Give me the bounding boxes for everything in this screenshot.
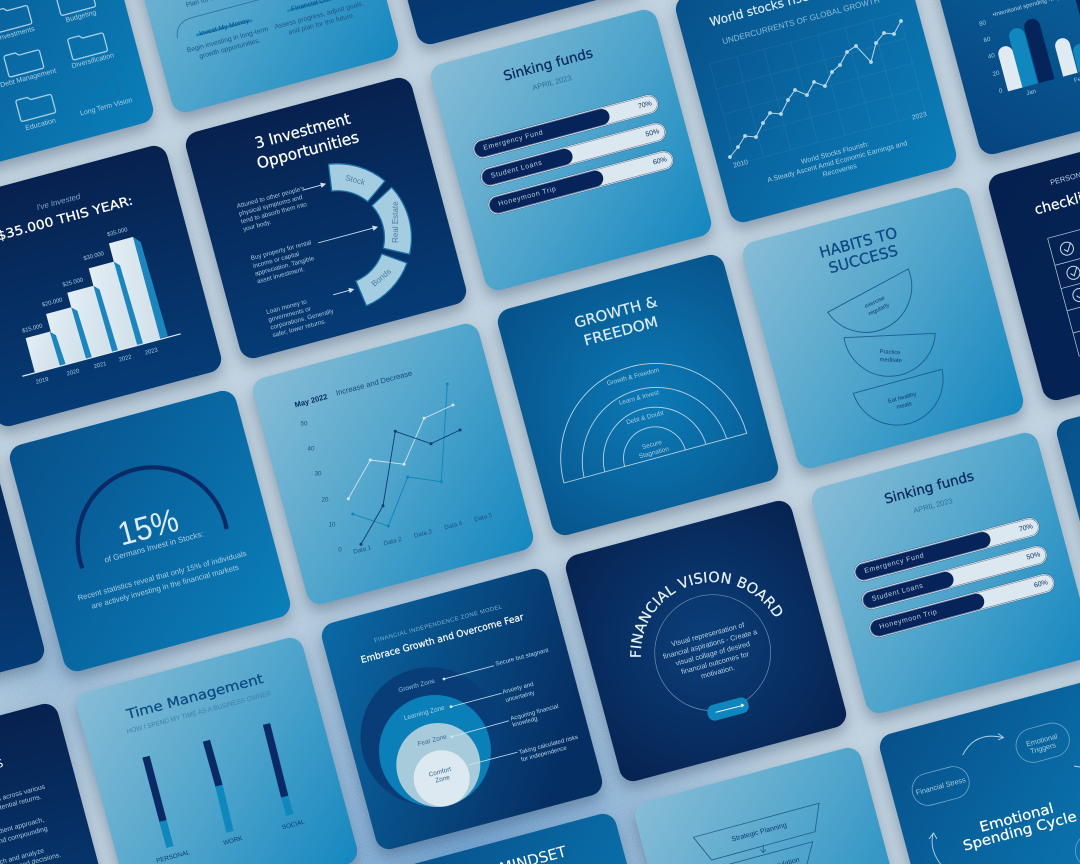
button with arrow [706,696,750,722]
bowl labels: exercise [864,295,886,310]
panel: sinking funds duplicate: 60% [1033,579,1049,590]
axis labels: Data 5 [474,512,494,523]
panel: may 2022 line chart: Increase and Decrease [335,368,413,398]
bar chart: 2021 [93,361,107,370]
panel: may 2022 line chart: May 2022 [294,392,328,409]
panel: financial vision board [560,500,852,794]
leader text: Anxiety and [502,681,534,696]
series lines [347,382,462,546]
bar chart: 2023 [144,347,158,357]
panel: habits to success: SUCCESS [827,241,900,277]
leader text: uncertainty [505,689,536,704]
panel: 3 investment opportunities: Real Estate [391,201,400,243]
panel: i've invested: I've Invested [36,192,82,212]
panel: sinking funds: 50% [645,128,660,139]
panel: 3 investment opportunities: corporations. Generally [270,308,335,331]
panel: 3 investment opportunities: physical symptoms and [238,194,304,218]
rainbow labels: Learn & Invest [618,389,660,407]
rainbow labels: Secure [641,439,663,451]
panel: 3 investment opportunities: 3 Investment [253,110,352,152]
gauge arc [78,467,227,568]
bar chart: $30.000 [83,251,105,262]
nested zones [360,667,500,807]
axis labels: Data 2 [383,536,403,547]
cycle arrows [929,734,1080,864]
body text: financial aspirations - Create a [662,627,758,661]
panel: 3 investment opportunities: income or capital [252,251,300,270]
panel: emotional spending cycle: Financial Stress [915,775,967,797]
panel: sinking funds: Student Loans [490,159,543,180]
panel: 15 percent [7,388,293,674]
stacked bars [146,724,290,847]
panel: folders: Budgeting [65,9,97,24]
rainbow labels: Growth & Freedom [606,367,660,387]
bar chart: $20.000 [42,297,63,309]
arrows [302,172,392,297]
body text: visual collage of desired [674,639,751,668]
panel: world stocks: 2010 [733,159,749,170]
axis labels: Data 4 [444,520,464,531]
panel: spending bars: 0 [998,87,1004,95]
panel: 3 investment opportunities: asset investment. [256,266,306,285]
panel: emotional spending cycle: Emotional [1025,731,1059,748]
panel: invest my money: Begin investing in long-term [186,26,269,54]
panel: folders: Debt Management [0,68,57,89]
stacked bowls [828,269,943,425]
rainbow labels [606,367,670,460]
panel: sinking funds: 60% [652,156,668,167]
panel: emotional spending cycle [877,677,1080,864]
panel: spending bars [922,0,1080,157]
leader text: for independence [520,744,568,763]
panel: sinking funds [428,7,714,293]
circle outline [655,595,771,711]
panel: growth and freedom [495,252,781,538]
panel: spending bars: 20 [992,69,1001,78]
panel: i've invested [0,143,224,429]
panel: sinking funds: APRIL 2023 [531,73,572,92]
panel: folders: Long Term Vision [79,97,133,118]
bar chart: 2022 [118,354,132,364]
bar labels: SOCIAL [281,819,306,831]
panel: embrace growth zones: Embrace Growth and Overcome Fear [360,612,525,666]
panel: top navy card [360,0,646,47]
panel: invest my money: Invest My Money [199,17,251,38]
bowl labels: regularly [868,303,890,317]
bowl labels: Eat healthy [888,392,917,405]
panel: habits to success: HABITS TO [817,224,899,262]
panel: 3 investment opportunities: tend to absorb them into [240,201,308,225]
panel: world stocks [673,0,959,225]
line chart [728,19,903,159]
leader text: Secure but stagnant [495,647,550,668]
zone labels: Growth Zone [398,678,436,694]
bar labels [156,819,306,864]
leader text: Taking calculated risks [518,734,579,756]
panel: 3 investment opportunities: Stock [344,173,367,187]
panel: world stocks: A Steady Ascent Amid Economic Earnings and [767,140,908,184]
panel: folders: Diversification [71,52,115,70]
axis labels: Data 3 [413,528,433,540]
axis labels: 40 [308,446,315,452]
panel: sinking funds duplicate: Honeymoon Trip [879,609,938,631]
panel: spending bars: 60 [983,36,992,44]
panel: time management [74,635,360,864]
panel: 3 investment opportunities: Bonds [370,267,393,288]
panel: invest my money: and plan for the future. [288,12,356,37]
panel: sinking funds duplicate: Emergency Fund [864,552,925,575]
panel: 3 investment opportunities: Attuned to other people's [236,185,305,210]
panel: spending bars: 80 [978,19,987,28]
panel: checklist [986,117,1080,403]
panel: sinking funds duplicate: 50% [1026,551,1041,562]
body text: Visual representation of [670,620,745,648]
panel: 3 investment opportunities: your body. [242,219,272,233]
panel: world stocks: Recoveries [822,163,858,179]
axis labels: 10 [329,522,336,528]
panel: embrace growth zones: FINANCIAL INDEPENDENCE ZONE MODEL [374,604,504,644]
caption: Recent statistics reveal that only 15% of individuals [77,549,248,603]
axis labels: Data 1 [353,544,373,556]
panel: growth and freedom: FREEDOM [582,314,660,350]
panel: sinking funds duplicate: 70% [1018,523,1034,534]
panel: invest my money: growth opportunities. [199,37,261,60]
panel: 3 investment opportunities: appreciation. Tangible [254,255,316,278]
panel: 3 investment opportunities: Loan money to [266,298,308,316]
bar chart: 2019 [35,377,49,386]
caption [77,529,248,611]
panel: left navy card [0,434,47,720]
panel: 3 investment opportunities: Opportunities [255,128,361,173]
panel: strategies card [0,701,115,864]
panel: spending bars: Jan [1025,88,1037,97]
caption: are actively investing in the financial markets [90,563,240,611]
bar chart: 2020 [66,368,80,378]
bowl labels: Practice [879,349,901,356]
zone labels: Zone [435,774,451,785]
panel: embrace growth zones [319,566,605,852]
body text: motivation. [700,663,736,681]
rainbow arcs [561,363,747,483]
panel: sinking funds: Emergency Fund [483,129,544,152]
panel: world stocks: 2023 [911,111,928,122]
panel: emotional spending cycle: Triggers [1029,740,1057,756]
bowl labels: meditate [879,357,902,364]
rainbow labels: Debt & Doubt [626,410,665,426]
axis labels: 0 [338,546,342,554]
leader text [495,647,579,763]
rainbow labels: Stagnation [638,446,670,460]
zone labels: Fear Zone [417,733,448,748]
panel: sinking funds: 70% [637,100,653,111]
panel: may 2022 line chart [250,321,536,607]
axis labels: 20 [322,496,329,504]
panel: sinking funds duplicate: APRIL 2023 [912,496,953,515]
axis labels: 50 [301,420,308,428]
panel: 3 investment opportunities: governments or [268,306,312,324]
axis labels [301,420,494,556]
panel: time management: HOW I SPEND MY TIME AS A BUSINESS OWNER [126,690,272,736]
bar chart: $35.000 [107,227,128,238]
bowl labels: meals [896,401,913,411]
bar chart: $25.000 [62,277,84,289]
panel: habits to success [740,185,1026,471]
bowl labels [864,295,917,411]
panel: emotional spending cycle: Emotional [978,801,1055,836]
zone labels: Comfort [428,766,452,779]
panel: mindset card [387,811,673,864]
panel: sinking funds duplicate: Sinking funds [883,468,976,508]
bar labels: WORK [223,835,244,847]
panel: sinking funds duplicate [809,430,1080,716]
funnel shapes [693,803,819,864]
panel: 3 investment opportunities: safer, lower returns. [272,318,327,339]
zone labels: Learning Zone [403,704,446,722]
leader text: Acquiring financial [510,703,559,722]
panel: invest my money [115,0,401,115]
zone labels [398,678,452,785]
panel: funnel: Strategic Planning [731,822,788,843]
panel: growth and freedom: GROWTH & [573,294,659,332]
pills [909,719,1080,864]
curved title: FINANCIAL VISION BOARD [630,571,782,657]
panel: sinking funds duplicate: Student Loans [871,582,924,603]
body text: financial outcomes for [680,649,751,676]
panel: medium blue edge card [1054,363,1080,649]
panel: 3 investment opportunities [183,75,469,361]
small arrow [760,845,766,852]
panel: 3 investment opportunities: Buy property for rental [250,239,312,262]
axis labels: 30 [315,470,322,478]
body text [662,620,758,681]
semi-circle segments [325,148,428,307]
caption: of Germans Invest in Stocks: [103,529,205,565]
panel: sinking funds: Honeymoon Trip [498,186,557,208]
panel: emotional spending cycle: Spending Cycle [961,809,1079,855]
panel: spending bars: 40 [987,52,996,61]
panel: funnel [632,745,918,864]
leader text: knowledg [512,715,538,729]
panel: sinking funds: Sinking funds [502,45,595,85]
panel: world stocks: World Stocks Flourish: [800,141,870,166]
bar chart: $15.000 [22,323,43,335]
big number: 15% [114,501,182,552]
bar chart [0,221,184,389]
leader lines [443,666,517,765]
panel: invest my money: Assess progress, adjust goals, [274,0,365,31]
panel: folders [0,0,156,180]
panel: folders: Education [25,117,57,132]
panel: time management: Time Management [124,671,265,723]
